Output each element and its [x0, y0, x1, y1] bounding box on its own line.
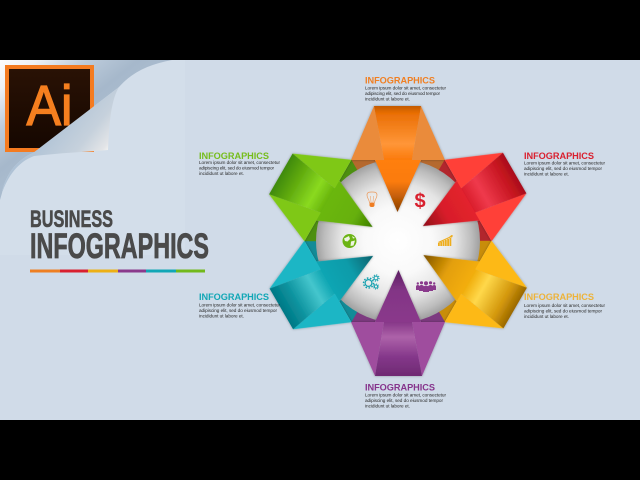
arm: green: [258, 133, 396, 267]
icon: Adobe Illustrator logo: Ai: [26, 74, 72, 138]
title: INFOGRAPHICS: [30, 227, 209, 266]
icon: globe: [342, 234, 356, 248]
arm: yellow: [400, 215, 538, 349]
text block: red: Lorem ipsum dolor sit amet, consectetur: [524, 160, 605, 166]
text block: yellow: [524, 292, 605, 319]
text block: green: adipiscing elit, sed do eiusmod tempor: [199, 166, 274, 170]
text block: teal: INFOGRAPHICS: [199, 292, 269, 302]
arm: orange: [351, 106, 445, 212]
text block: red: incididunt ut labore et.: [524, 172, 569, 176]
icon: people: [416, 281, 436, 292]
text block: orange: incididunt ut labore et.: [365, 96, 410, 102]
icon: light bulb: [367, 192, 377, 207]
text block: red: adipiscing elit, sed do eiusmod tempor: [524, 166, 602, 171]
text block: teal: adipiscing elit, sed do eiusmod tempor: [199, 308, 277, 313]
title: BUSINESS: [30, 206, 113, 233]
text block: green: INFOGRAPHICS: [199, 151, 269, 161]
icon: gears: [364, 275, 379, 289]
text block: yellow: Lorem ipsum dolor sit amet, consectetur: [524, 303, 605, 308]
text block: green: incididunt ut labore et.: [199, 171, 244, 176]
page curl flap: [2, 87, 119, 193]
text block: green: Lorem ipsum dolor sit amet, consectetur: [199, 160, 280, 165]
icon: Adobe Illustrator logo: [7, 67, 92, 150]
text block: teal: [199, 292, 280, 318]
text block: red: INFOGRAPHICS: [524, 151, 594, 161]
dark fold wedges under the disc: [304, 160, 492, 322]
arm: purple: [351, 270, 445, 376]
text block: orange: [365, 76, 446, 102]
central white disc: [316, 159, 480, 323]
arm: red: [400, 133, 538, 267]
icon: bar chart: [438, 235, 453, 246]
arm: teal: [258, 215, 396, 349]
text block: purple: adipiscing elit, sed do eiusmod tempor: [365, 398, 443, 403]
text block: yellow: incididunt ut labore et.: [524, 314, 569, 319]
peeled corner area behind the page: [0, 60, 172, 200]
bottom letterbox bar: [0, 420, 640, 480]
colour bar under title: [30, 270, 205, 272]
title: [30, 206, 209, 266]
text block: red: [524, 151, 605, 176]
text block: teal: Lorem ipsum dolor sit amet, consectetur: [199, 302, 280, 308]
text block: teal: incididunt ut labore et.: [199, 314, 244, 318]
text block: purple: Lorem ipsum dolor sit amet, consectetur: [365, 392, 446, 398]
text block: purple: [365, 382, 446, 408]
text block: yellow: INFOGRAPHICS: [524, 292, 594, 302]
text block: yellow: adipiscing elit, sed do eiusmod tempor: [524, 308, 602, 314]
text block: orange: adipiscing elit, sed do eiusmod tempor: [365, 91, 440, 96]
top letterbox bar: [0, 0, 640, 60]
text block: green: [199, 151, 280, 176]
text block: purple: incididunt ut labore et.: [365, 404, 410, 408]
lighter page square: [0, 60, 185, 255]
icon: dollar sign: $: [414, 190, 426, 212]
text block: orange: INFOGRAPHICS: [365, 76, 435, 86]
text block: purple: INFOGRAPHICS: [365, 382, 435, 392]
text block: orange: Lorem ipsum dolor sit amet, consectetur: [365, 86, 446, 90]
